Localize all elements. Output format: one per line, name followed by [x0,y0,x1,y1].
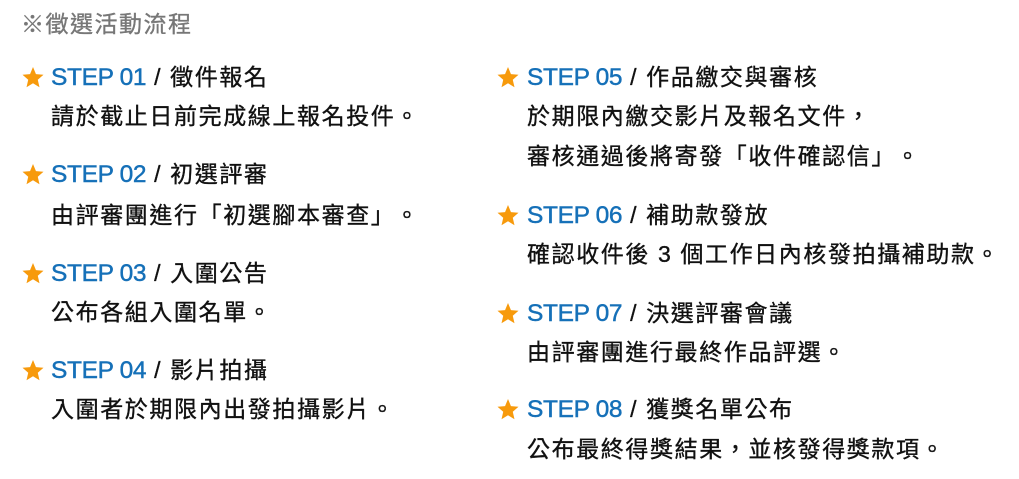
step 03 [22,260,272,325]
step 05 [498,64,921,169]
icon: star [498,399,518,420]
description: 入圍者於期限內出發拍攝影片。 [51,396,395,422]
heading: STEP 05 / 作品繳交與審核 [527,64,818,91]
icon: star [22,263,44,284]
description line 2: 審核通過後將寄發「收件確認信」。 [527,143,921,169]
step 08 [498,396,945,462]
description: 請於截止日前完成線上報名投件。 [51,103,420,129]
heading: STEP 01 / 徵件報名 [51,64,269,91]
icon: star [498,303,518,324]
icon: star [22,164,44,184]
step 07 [498,300,847,365]
heading: STEP 07 / 決選評審會議 [527,300,794,327]
heading: STEP 03 / 入圍公告 [51,260,269,287]
icon: star [498,205,518,226]
title: ※徵選活動流程 [21,11,192,37]
heading: STEP 02 / 初選評審 [51,161,269,188]
step 01 [22,64,420,129]
heading: STEP 06 / 補助款發放 [527,202,769,229]
heading: STEP 04 / 影片拍攝 [51,357,269,384]
step 06 [498,202,1000,267]
step 02 [22,161,420,228]
heading: STEP 08 / 獲獎名單公布 [527,396,794,423]
icon: star [498,67,518,88]
step 04 [22,357,395,422]
icon: star [22,67,44,88]
description: 公布最終得獎結果，並核發得獎款項。 [527,436,945,462]
description: 確認收件後 3 個工作日內核發拍攝補助款。 [527,241,1000,267]
description: 由評審團進行最終作品評選。 [527,339,847,365]
icon: star [22,360,44,380]
description line 1: 於期限內繳交影片及報名文件， [527,103,871,129]
description: 公布各組入圍名單。 [51,299,272,325]
description: 由評審團進行「初選腳本審查」。 [51,202,420,228]
